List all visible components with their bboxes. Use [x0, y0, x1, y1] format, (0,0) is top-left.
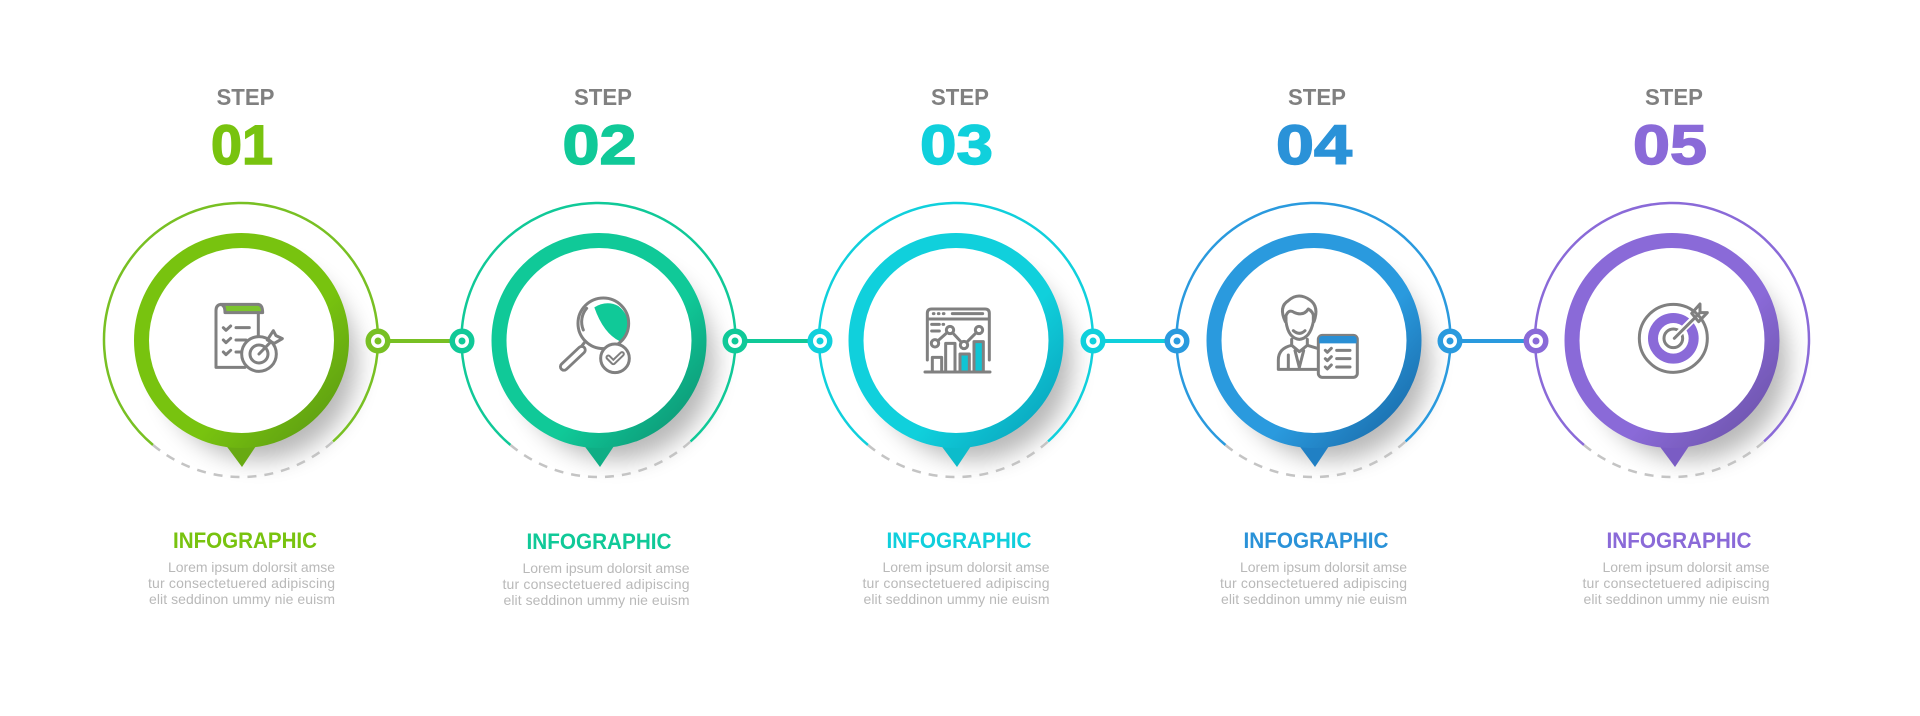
node left — [1167, 331, 1187, 351]
body text: Lorem ipsum dolorsit amse — [1602, 559, 1770, 575]
body text: elit seddinon ummy nie euism — [149, 591, 335, 607]
outer ring — [819, 203, 1093, 445]
body text — [148, 559, 335, 607]
number 03: 03 — [920, 113, 993, 176]
icon: checklist with target — [216, 304, 282, 371]
shadow — [161, 264, 357, 460]
connector: step 3 to 4 — [1093, 339, 1177, 343]
label: STEP 3: STEP — [931, 84, 989, 110]
title: INFOGRAPHIC — [1244, 528, 1389, 553]
body text: tur consectetuered adipiscing — [862, 575, 1050, 591]
shadow — [1234, 264, 1430, 460]
title: INFOGRAPHIC — [1606, 528, 1752, 553]
dashed arc — [153, 442, 333, 477]
shadow — [876, 264, 1072, 460]
dashed arc — [868, 442, 1048, 477]
body text — [1582, 559, 1770, 607]
body text: Lorem ipsum dolorsit amse — [1240, 559, 1407, 575]
dashed arc — [510, 442, 690, 477]
label: STEP 5: STEP — [1645, 84, 1703, 110]
number 01: 01 — [211, 113, 273, 176]
node right — [1083, 331, 1103, 351]
panel: step 3 — [810, 84, 1103, 607]
body text: tur consectetuered adipiscing — [148, 575, 335, 591]
panel: step 4 — [1167, 84, 1460, 607]
pointer ring — [1572, 240, 1772, 467]
node left — [810, 331, 830, 351]
node right — [1440, 331, 1460, 351]
body text — [862, 559, 1050, 607]
body text: elit seddinon ummy nie euism — [864, 591, 1050, 607]
label: STEP 2: STEP — [574, 84, 632, 110]
body text: Lorem ipsum dolorsit amse — [882, 559, 1050, 575]
label: STEP 1: STEP — [216, 84, 274, 110]
pointer ring — [856, 240, 1056, 467]
body text — [1220, 559, 1407, 607]
label: STEP 4: STEP — [1288, 84, 1346, 110]
panel: step 5 — [1526, 84, 1809, 607]
node left — [1526, 331, 1546, 351]
body text: tur consectetuered adipiscing — [502, 576, 690, 592]
body text: elit seddinon ummy nie euism — [504, 592, 690, 608]
node right — [725, 331, 745, 351]
number 02: 02 — [562, 113, 636, 176]
body text: tur consectetuered adipiscing — [1220, 575, 1407, 591]
pointer ring — [142, 240, 342, 467]
icon: bullseye with arrow — [1639, 304, 1707, 372]
dashed arc — [1584, 442, 1764, 477]
connector: step 2 to 3 — [735, 339, 820, 343]
body text: Lorem ipsum dolorsit amse — [522, 560, 690, 576]
panel: step 2 — [452, 84, 745, 608]
number 04: 04 — [1276, 113, 1352, 176]
icon: magnifier with check — [564, 298, 629, 373]
title: INFOGRAPHIC — [526, 529, 672, 554]
shadow — [518, 264, 714, 460]
icon: person with checklist — [1278, 296, 1357, 377]
panel: step 1 — [104, 84, 388, 607]
outer ring — [1176, 203, 1450, 445]
body text: elit seddinon ummy nie euism — [1584, 591, 1770, 607]
dashed arc — [1226, 442, 1406, 477]
pointer ring — [1214, 240, 1414, 467]
node left — [452, 331, 472, 351]
body text: elit seddinon ummy nie euism — [1221, 591, 1407, 607]
outer ring — [104, 203, 378, 445]
title: INFOGRAPHIC — [173, 528, 317, 553]
pointer ring — [499, 240, 699, 467]
number 05: 05 — [1633, 113, 1707, 176]
body text: tur consectetuered adipiscing — [1582, 575, 1770, 591]
connector: step 1 to 2 — [378, 339, 462, 343]
connector: step 4 to 5 — [1450, 339, 1536, 343]
title: INFOGRAPHIC — [886, 528, 1032, 553]
outer ring — [461, 203, 735, 445]
outer ring — [1535, 203, 1809, 445]
shadow — [1592, 264, 1788, 460]
body text: Lorem ipsum dolorsit amse — [168, 559, 335, 575]
node right — [368, 331, 388, 351]
body text — [502, 560, 690, 608]
icon: dashboard chart — [925, 309, 990, 372]
